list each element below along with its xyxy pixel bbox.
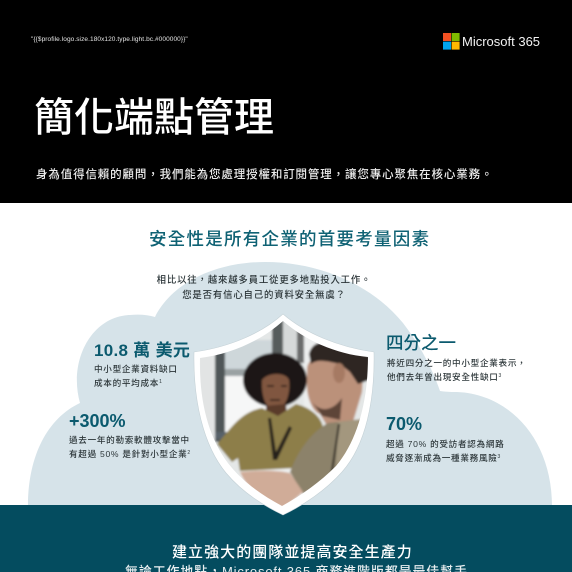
logo wordmark: Microsoft 365 (462, 34, 540, 49)
stat number: +300% (69, 411, 126, 431)
stat description: 將近四分之一的中小型企業表示， (387, 358, 526, 368)
shield frame (194, 314, 374, 515)
stat: 70 percent (386, 414, 504, 463)
subtitle: 身為值得信賴的顧問，我們能為您處理授權和訂閱管理，讓您專心聚焦在核心業務。 (36, 169, 493, 181)
stat description: 中小型企業資料缺口 (94, 364, 178, 374)
stat: cost of breach (94, 341, 190, 388)
stat description (386, 439, 504, 463)
stat number: 10.8 萬 美元 (94, 341, 190, 360)
bottom teal band (0, 505, 572, 572)
stat: one quarter (386, 333, 526, 382)
stat description (94, 364, 178, 388)
stat description: 有超過 50% 是針對小型企業2 (69, 449, 190, 459)
shield photo (194, 314, 374, 516)
icon: Microsoft four squares (443, 33, 460, 50)
title: 簡化端點管理 (34, 96, 274, 140)
stat: ransomware (69, 411, 190, 459)
stat description (387, 358, 526, 382)
stat description: 過去一年的勒索軟體攻擊當中 (69, 435, 190, 445)
stat number: 四分之一 (386, 333, 456, 353)
footer heading: 建立強大的團隊並提高安全生產力 (172, 544, 413, 561)
template placeholder text: "{{$profile.logo.size.180x120.type.light.bc.#000000}}" (31, 36, 188, 43)
forearm (240, 471, 303, 508)
man (307, 354, 364, 425)
header band (0, 0, 572, 203)
stat number: 70% (386, 414, 422, 434)
intro text (156, 274, 371, 300)
logo: Microsoft 365 (443, 33, 540, 50)
stat description: 成本的平均成本1 (94, 378, 162, 388)
photo: two colleagues (200, 321, 368, 506)
intro text: 您是否有信心自己的資料安全無虞？ (182, 288, 346, 300)
stat description: 威脅逐漸成為一種業務風險3 (386, 453, 500, 463)
stat description: 他們去年曾出現安全性缺口3 (387, 372, 501, 382)
woman (243, 353, 307, 407)
section heading: 安全性是所有企業的首要考量因素 (149, 229, 430, 249)
intro text: 相比以往，越來越多員工從更多地點投入工作。 (157, 274, 371, 285)
stat description: 超過 70% 的受訪者認為網路 (386, 439, 504, 449)
stat description (69, 435, 190, 459)
